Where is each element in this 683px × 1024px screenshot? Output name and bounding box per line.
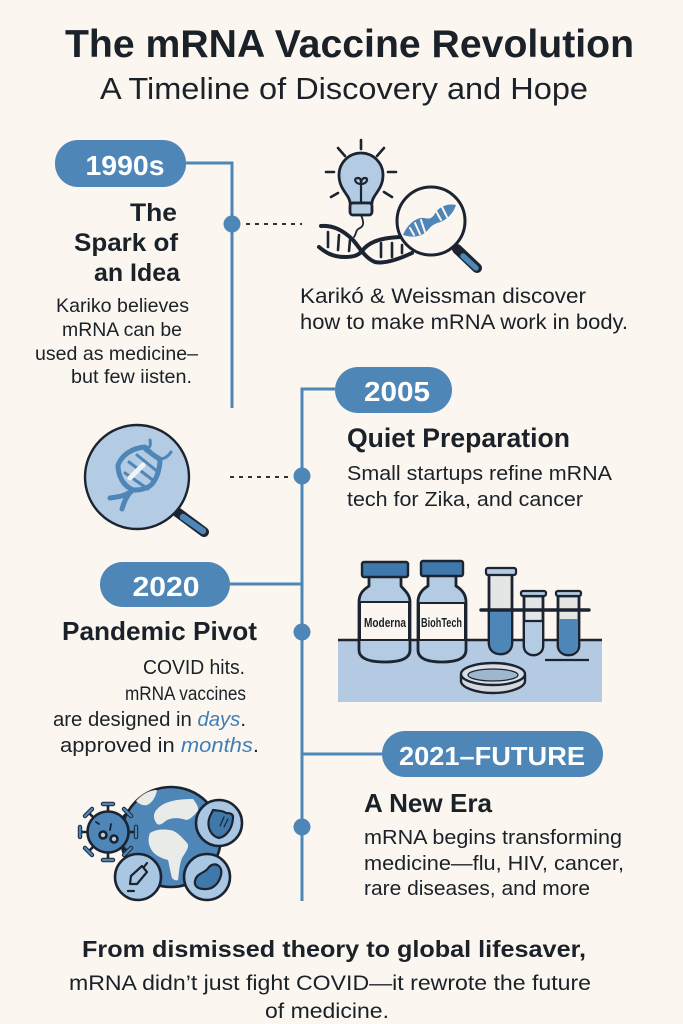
body text 2020: mRNA vaccines xyxy=(125,684,246,705)
body text 2020 xyxy=(53,657,259,757)
body text 2005: Small startups refine mRNA xyxy=(347,462,612,485)
year pill: 2005: 2005 xyxy=(364,376,430,407)
heading: The Spark of an Idea: an Idea xyxy=(94,259,181,287)
timeline dot 2005 xyxy=(294,468,310,484)
body text 2005 xyxy=(347,462,612,511)
dotted connector 1990s xyxy=(246,223,302,225)
title: The mRNA Vaccine Revolution xyxy=(65,23,634,66)
body text 2021 xyxy=(364,827,624,900)
body text 1990s xyxy=(35,295,198,388)
footer conclusion xyxy=(69,936,591,1023)
year pill: 1990s xyxy=(55,140,186,187)
footer conclusion: mRNA didn’t just fight COVID—it rewrote the future xyxy=(69,972,591,995)
body text 2005: tech for Zika, and cancer xyxy=(347,488,583,511)
body text 2020: are designed in days. xyxy=(53,709,246,731)
body text 1990s: used as medicine– xyxy=(35,343,198,365)
year pill: 2020 xyxy=(100,562,230,607)
icon: magnified DNA xyxy=(85,425,204,532)
body text 2020: COVID hits. xyxy=(143,657,245,679)
icon: globe with virus, heart, syringe and organ xyxy=(80,787,242,900)
year pill: 2021–Future: 2021–FUTURE xyxy=(399,741,585,771)
icon: vials and test tubes on lab bench xyxy=(338,561,602,702)
timeline dot 2021 xyxy=(294,818,310,836)
timeline dot 2020 xyxy=(294,624,310,640)
body text 2021: mRNA begins transforming xyxy=(364,827,622,849)
panel: 2021–Future xyxy=(294,731,624,900)
subtitle: A Timeline of Discovery and Hope xyxy=(100,72,588,106)
heading: The Spark of an Idea: Spark of xyxy=(74,229,179,257)
body text 2020: approved in months . xyxy=(60,735,259,757)
icon: vials and test tubes on lab bench: BiohTech xyxy=(421,616,462,630)
panel: 1990s xyxy=(35,140,628,388)
timeline connector lines xyxy=(186,163,382,901)
heading: A New Era: A New Era xyxy=(364,788,493,818)
panel: 2020 xyxy=(53,562,310,900)
timeline dot 1990s xyxy=(224,216,240,232)
icon: vials and test tubes on lab bench: Moderna xyxy=(364,616,407,630)
year pill: 2021–Future xyxy=(382,731,603,777)
caption: Karikó & Weissman: how to make mRNA work in body. xyxy=(300,311,628,334)
body text 1990s: Kariko believes xyxy=(56,295,189,317)
footer conclusion: From dismissed theory to global lifesaver, xyxy=(82,936,586,962)
body text 2021: rare diseases, and more xyxy=(364,878,590,900)
body text 1990s: but few iisten. xyxy=(71,366,192,388)
heading: Quiet Preparation: Quiet Preparation xyxy=(347,423,570,453)
icon: light bulb with DNA and magnifier xyxy=(319,140,477,268)
heading: The Spark of an Idea xyxy=(74,199,181,287)
footer conclusion: of medicine. xyxy=(265,1000,389,1023)
caption: Karikó & Weissman xyxy=(300,285,628,334)
caption: Karikó & Weissman: Karikó & Weissman discover xyxy=(300,285,586,308)
body text 1990s: mRNA can be xyxy=(62,319,182,341)
body text 2021: medicine—flu, HIV, cancer, xyxy=(364,853,624,875)
year pill: 2005 xyxy=(335,367,452,413)
year pill: 2020: 2020 xyxy=(132,571,200,602)
dotted connector 2005 xyxy=(230,476,288,478)
year pill: 1990s: 1990s xyxy=(86,150,164,181)
panel: 2005 xyxy=(85,367,612,702)
heading: The Spark of an Idea: The xyxy=(130,199,177,227)
heading: Pandemic Pivot: Pandemic Pivot xyxy=(62,616,257,646)
